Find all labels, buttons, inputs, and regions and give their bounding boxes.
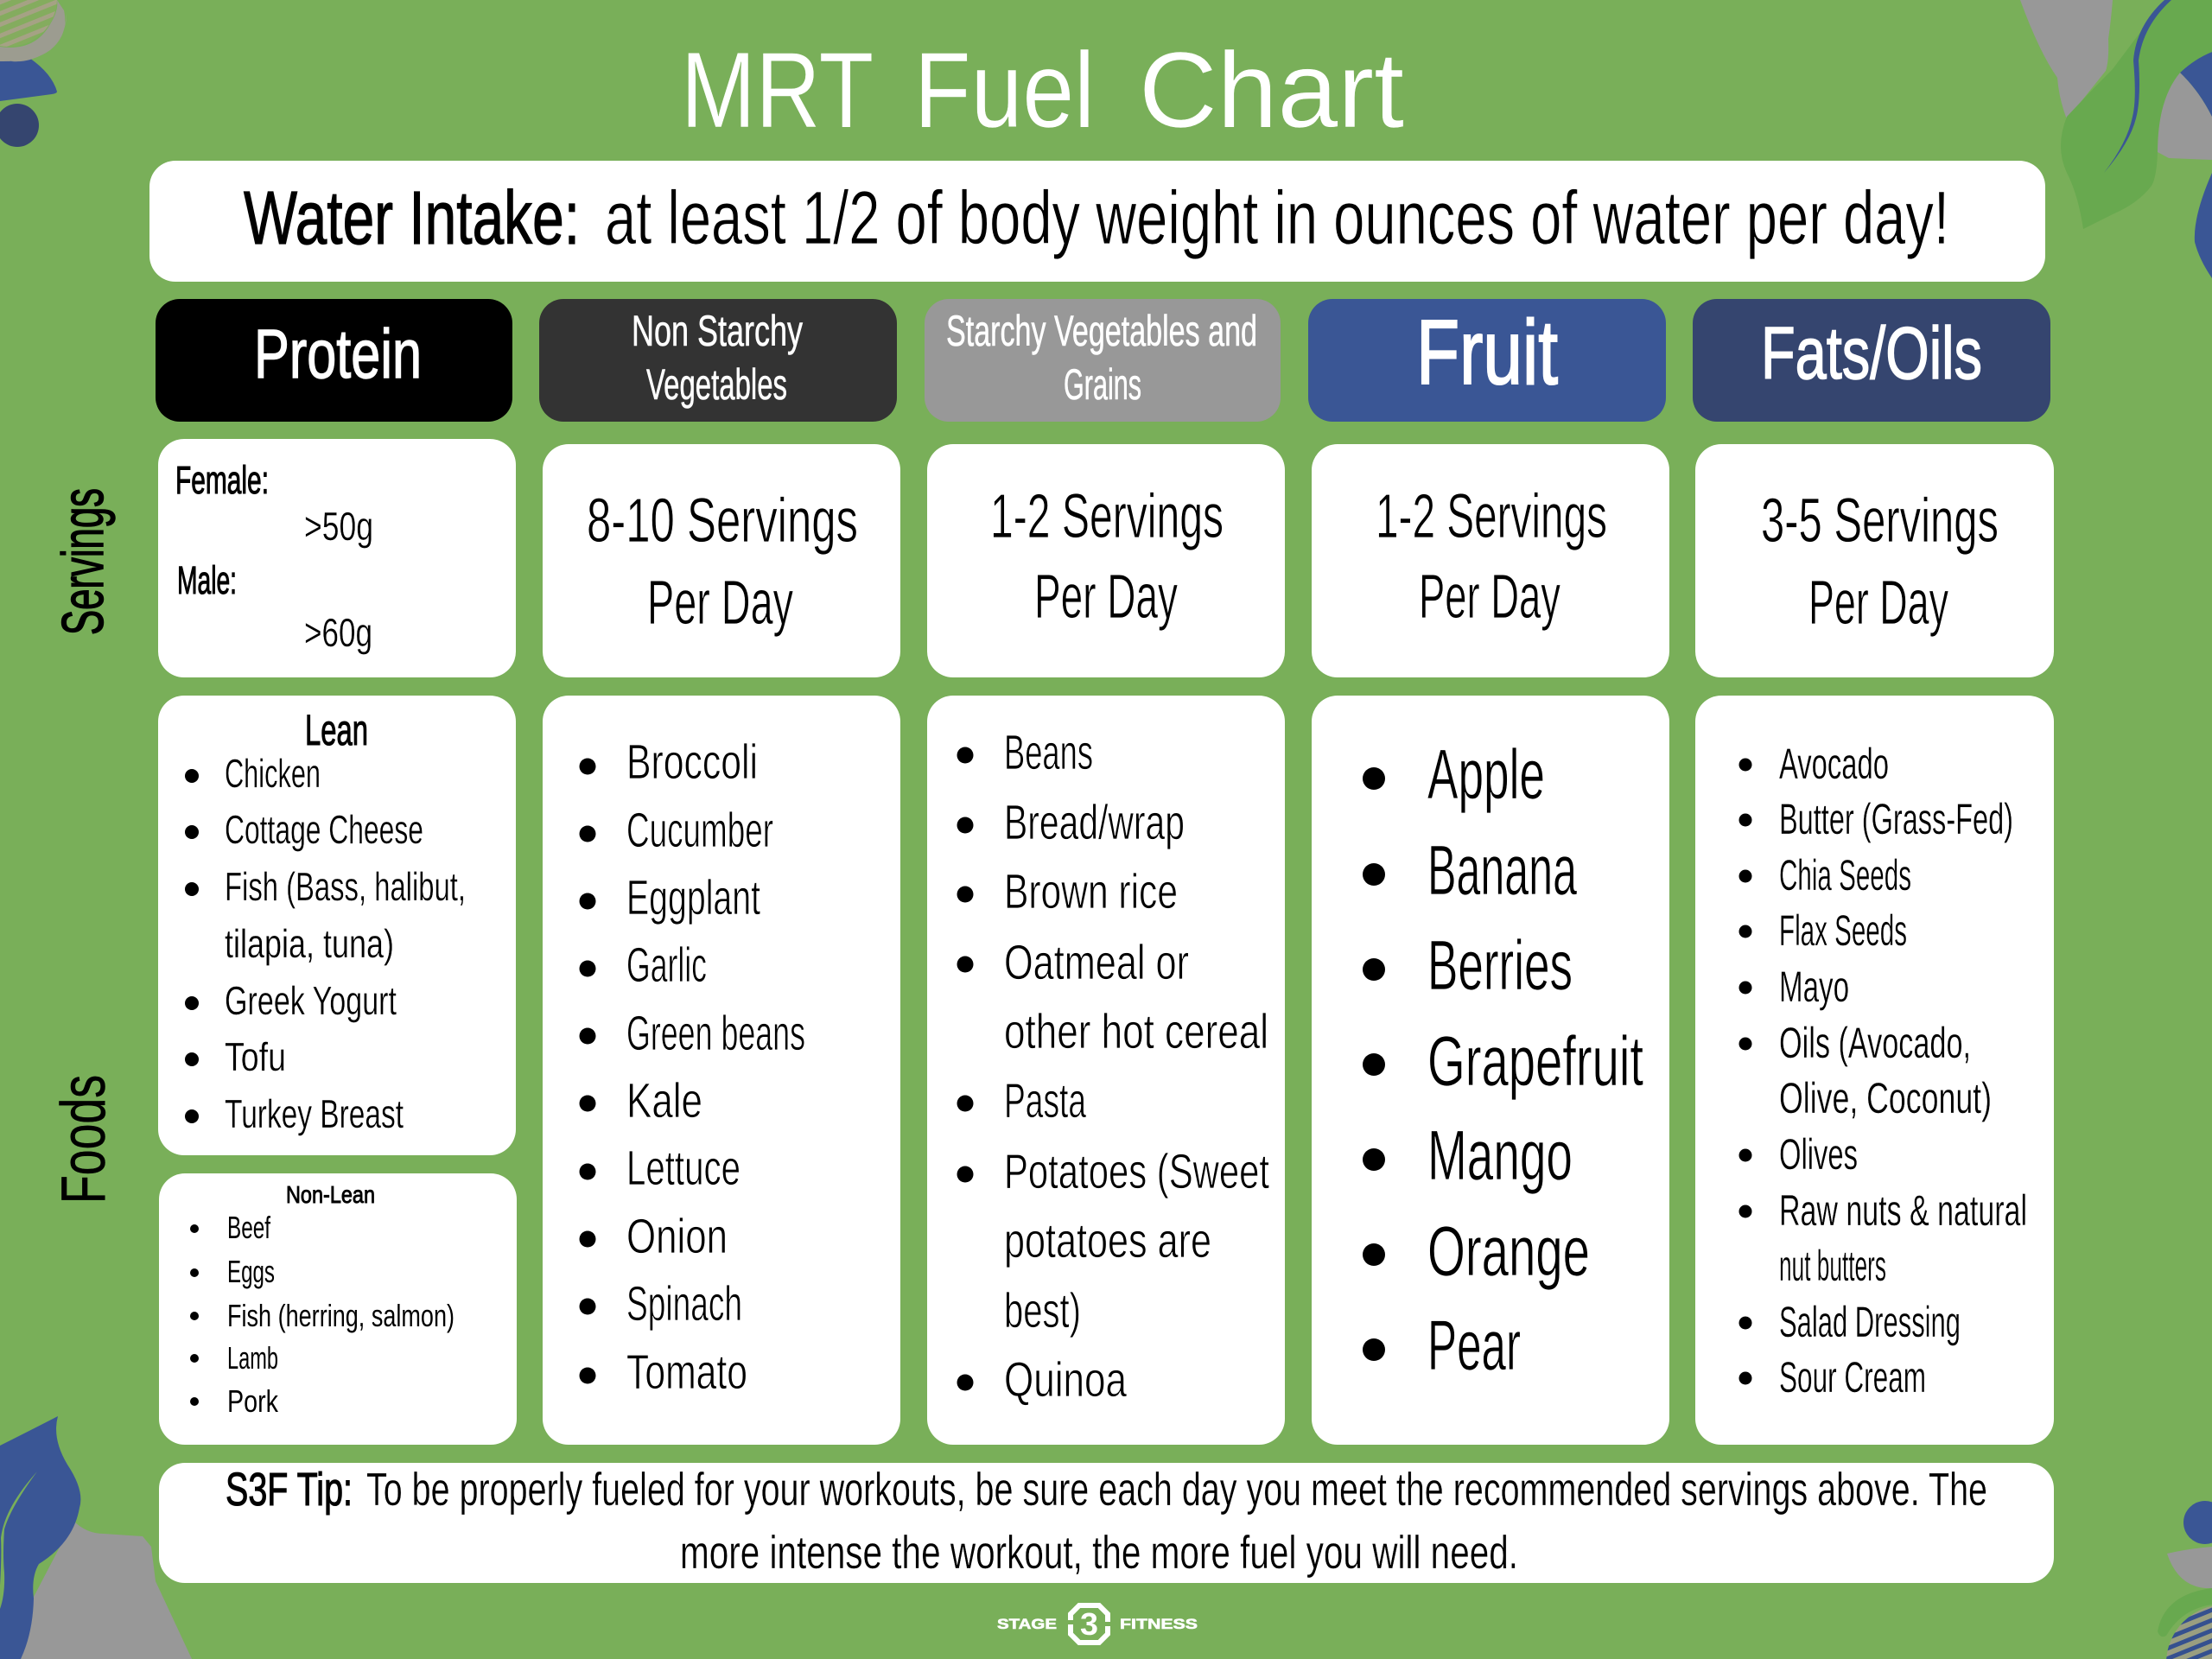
header: Non Starchy Vegetables: Vegetables (646, 360, 787, 409)
panel: starchy foods: Brown rice (1004, 864, 1178, 919)
panel: fats foods: Salad Dressing (1779, 1298, 1961, 1346)
panel: non starchy foods: Green beans (626, 1006, 805, 1061)
header: Fats/Oils: Fats/Oils (1761, 313, 1982, 395)
panel: starchy foods: Potatoes (Sweet (1004, 1144, 1269, 1199)
panel: protein servings: >50g (304, 504, 373, 549)
header: Starchy Vegetables and Grains (925, 299, 1281, 422)
panel: starchy foods: Beans (1004, 725, 1093, 780)
panel: fruit foods (1312, 696, 1669, 1445)
panel: fats foods: Sour Cream (1779, 1353, 1926, 1402)
panel: S3F tip: more intense the workout, the more fuel you will need. (680, 1527, 1518, 1579)
panel: fats foods (1695, 696, 2054, 1445)
panel: fruit foods: Mango (1427, 1116, 1573, 1195)
logo: Stage 3 Fitness (997, 1605, 1198, 1643)
panel: S3F tip: S3F Tip: (226, 1464, 353, 1516)
panel: fruit foods: Orange (1427, 1212, 1590, 1291)
panel: starchy servings (927, 444, 1285, 677)
panel: fats foods: Chia Seeds (1779, 851, 1911, 899)
panel: fats foods: Oils (Avocado, (1779, 1019, 1971, 1067)
panel: starchy foods: Pasta (1004, 1073, 1086, 1128)
panel: protein servings: >60g (304, 610, 372, 655)
panel: non starchy servings (543, 444, 900, 677)
panel: fats servings: 3-5 Servings (1761, 486, 1999, 556)
panel: non-lean protein foods: Beef (227, 1210, 271, 1245)
panel: non starchy foods: Spinach (626, 1276, 742, 1332)
panel: fruit foods: Grapefruit (1427, 1022, 1643, 1101)
logo: Stage 3 Fitness: STAGE (997, 1616, 1057, 1632)
panel: fruit foods: Pear (1427, 1306, 1521, 1385)
panel: non starchy servings: 8-10 Servings (587, 486, 858, 556)
panel: lean protein foods: Turkey Breast (225, 1091, 404, 1136)
panel: lean protein foods: Cottage Cheese (225, 807, 423, 852)
panel: fats servings: Per Day (1808, 569, 1948, 638)
header: Fruit (1308, 299, 1666, 422)
panel: fruit foods: Apple (1427, 735, 1545, 814)
panel: lean protein foods: tilapia, tuna) (225, 921, 394, 966)
header: Protein (156, 299, 512, 422)
panel: starchy servings: Per Day (1034, 563, 1178, 632)
panel: fruit servings: 1-2 Servings (1376, 482, 1607, 551)
panel: non-lean protein foods: Lamb (227, 1340, 278, 1376)
panel: fats foods: nut butters (1779, 1242, 1886, 1290)
panel: non starchy foods: Onion (626, 1209, 728, 1264)
panel: water intake banner (149, 161, 2045, 282)
panel: non-lean protein foods (159, 1173, 517, 1445)
panel: non-lean protein foods: Pork (227, 1383, 279, 1419)
panel: non starchy foods: Cucumber (626, 803, 773, 858)
panel: starchy servings: 1-2 Servings (990, 482, 1224, 551)
panel: non starchy foods: Kale (626, 1073, 702, 1128)
panel: fats foods: Olives (1779, 1130, 1858, 1179)
decoration: top-left shapes (0, 0, 67, 147)
decoration: bottom-left leaf (0, 1416, 192, 1659)
side label: Foods: Foods (49, 1075, 118, 1204)
panel: starchy foods: potatoes are (1004, 1213, 1211, 1268)
panel: starchy foods: best) (1004, 1283, 1081, 1338)
panel: fats foods: Butter (Grass-Fed) (1779, 795, 2013, 843)
panel: lean protein foods: Greek Yogurt (225, 978, 397, 1023)
panel: fats foods: Flax Seeds (1779, 906, 1907, 955)
logo: Stage 3 Fitness: FITNESS (1120, 1616, 1198, 1632)
title (681, 31, 1404, 150)
panel: protein servings: Male: (177, 558, 237, 602)
header: Non Starchy Vegetables: Non Starchy (632, 307, 803, 355)
panel: fruit servings: Per Day (1419, 563, 1560, 632)
panel: protein servings (158, 439, 516, 677)
panel: non-lean protein foods: Fish (herring, salmon) (227, 1298, 454, 1333)
header: Protein: Protein (254, 315, 422, 392)
panel: lean protein foods: Chicken (225, 751, 321, 796)
decoration: bottom-right shapes (2158, 1501, 2212, 1659)
title: Chart (1139, 31, 1404, 150)
panel: lean protein foods: Tofu (225, 1034, 286, 1079)
panel: fruit servings (1312, 444, 1669, 677)
panel: fruit foods: Berries (1427, 926, 1573, 1005)
panel: non starchy foods: Lettuce (626, 1141, 741, 1196)
logo: Stage 3 Fitness: 3 (1080, 1606, 1098, 1642)
panel: starchy foods: Oatmeal or (1004, 935, 1189, 990)
panel: lean protein foods (158, 696, 516, 1155)
panel: fats foods: Mayo (1779, 963, 1849, 1011)
panel: starchy foods: Quinoa (1004, 1352, 1127, 1408)
header: Non Starchy Vegetables (539, 299, 897, 422)
panel: fats foods: Olive, Coconut) (1779, 1074, 1992, 1122)
panel: starchy foods: Bread/wrap (1004, 795, 1185, 850)
panel: lean protein foods: Lean (305, 706, 368, 754)
panel: fats servings (1695, 444, 2054, 677)
panel: starchy foods (927, 696, 1285, 1445)
panel: protein servings: Female: (175, 458, 269, 502)
title: MRT (681, 31, 874, 150)
side label: Servings: Servings (50, 488, 116, 635)
panel: non starchy foods: Tomato (626, 1344, 747, 1400)
header: Starchy Vegetables and Grains: Starchy Vegetables and (946, 307, 1257, 355)
panel: non starchy servings: Per Day (647, 569, 793, 638)
panel: fats foods: Raw nuts & natural (1779, 1186, 2027, 1235)
panel: non starchy foods: Eggplant (626, 870, 760, 925)
panel: non-lean protein foods: Eggs (227, 1254, 275, 1289)
panel: water intake banner: Water Intake: (244, 176, 580, 260)
panel: non starchy foods: Broccoli (626, 734, 758, 790)
panel: non-lean protein foods: Non-Lean (286, 1181, 375, 1208)
panel: S3F tip (159, 1463, 2054, 1583)
panel: fruit foods: Banana (1427, 831, 1577, 910)
panel: fats foods: Avocado (1779, 740, 1889, 788)
header: Fruit: Fruit (1416, 302, 1558, 404)
panel: starchy foods: other hot cereal (1004, 1004, 1268, 1059)
title: Fuel (914, 31, 1095, 150)
decoration: top-right leaves (2020, 0, 2212, 278)
panel: non starchy foods (543, 696, 900, 1445)
header: Starchy Vegetables and Grains: Grains (1064, 360, 1141, 409)
panel: non starchy foods: Garlic (626, 938, 707, 993)
panel: lean protein foods: Fish (Bass, halibut, (225, 864, 466, 909)
header: Fats/Oils (1693, 299, 2050, 422)
